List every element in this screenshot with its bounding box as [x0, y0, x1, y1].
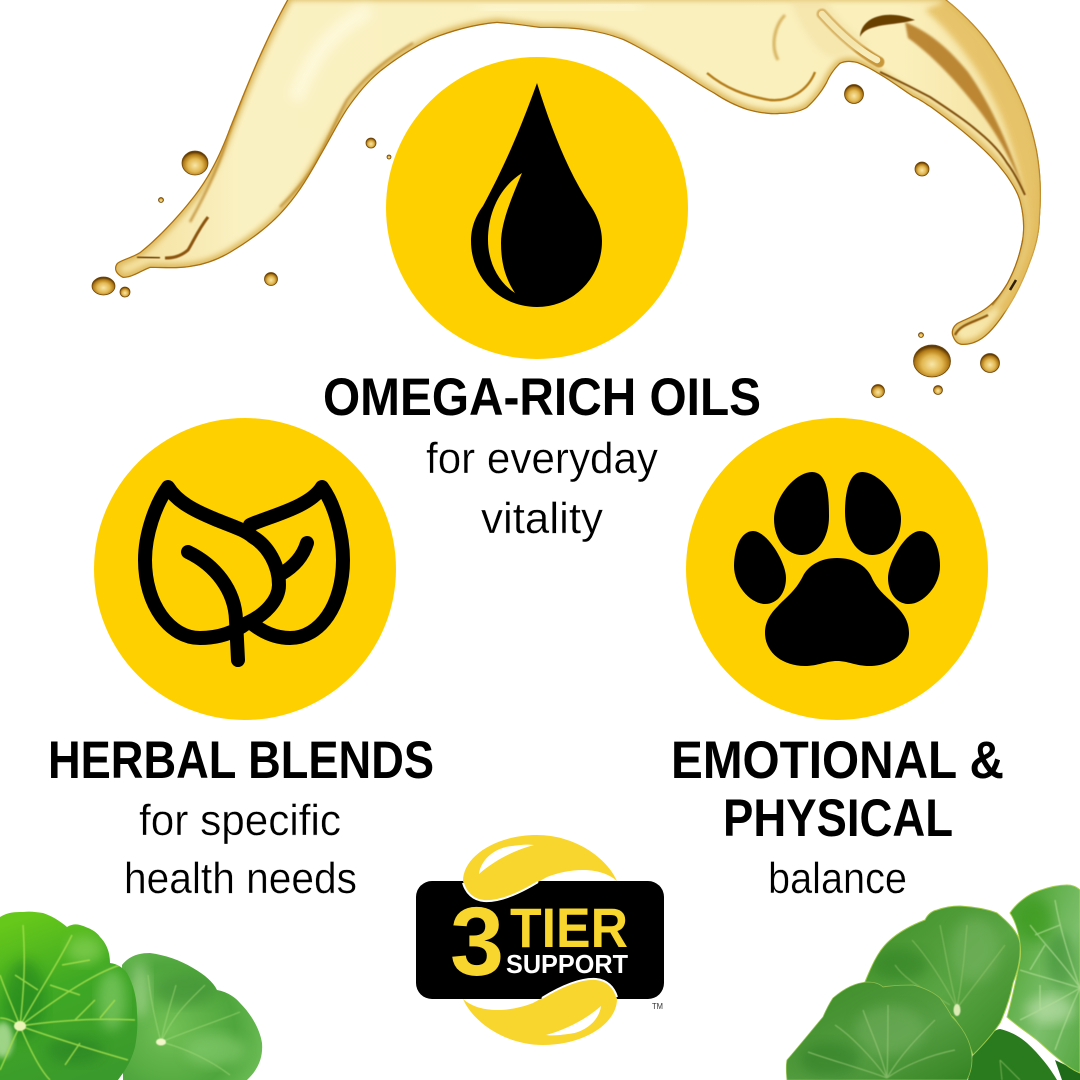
oil splash	[92, 0, 1041, 398]
amber streak: centre lower edge	[707, 72, 815, 100]
leaf: right	[1007, 885, 1080, 1073]
leaf: dark lower	[968, 1029, 1057, 1080]
text: for specific health needs: for specific	[139, 796, 341, 845]
heading: emotional and physical: EMOTIONAL &	[671, 731, 1004, 790]
panel: emotional and physical	[671, 418, 1004, 903]
yellow circle left	[94, 418, 396, 720]
panel: herbal blends	[48, 418, 434, 903]
leaves: bottom left	[0, 912, 262, 1080]
panel: omega-rich oils	[323, 57, 761, 543]
leaf: corner dark	[1055, 1060, 1080, 1080]
logo top swoosh	[463, 835, 617, 901]
logo word tier: TIER	[510, 896, 628, 959]
icon: leaves	[145, 487, 343, 660]
amber streak: upper right	[905, 22, 1025, 195]
dark inner line of right arm	[880, 72, 1025, 195]
leaves: bottom right	[786, 885, 1080, 1080]
icon: paw	[734, 472, 940, 666]
yellow circle top	[386, 57, 688, 359]
icon: oil drop	[471, 83, 602, 307]
heading: emotional and physical	[671, 731, 1004, 848]
oil inner shading	[115, 0, 1041, 345]
right arm golden band	[925, 0, 1041, 312]
logo: 3 tier support	[416, 835, 664, 1045]
amber streak: left arm	[190, 42, 265, 222]
yellow circle right	[686, 418, 988, 720]
text: for everyday vitality	[426, 434, 658, 543]
leaf: back	[122, 953, 262, 1080]
text: for everyday vitality: vitality	[481, 494, 603, 543]
text: balance: balance	[768, 854, 907, 903]
leaf: front left	[786, 982, 972, 1080]
logo bottom swoosh	[463, 979, 617, 1045]
logo word support: SUPPORT	[506, 949, 628, 979]
pale tube at junction	[822, 14, 879, 62]
trademark: TM	[652, 1002, 663, 1011]
leaf: back centre	[865, 906, 1020, 1055]
text: for specific health needs: health needs	[124, 854, 357, 903]
oil droplets	[92, 84, 1000, 398]
text: for specific health needs	[124, 796, 357, 903]
logo numeral: 3	[450, 887, 504, 996]
text: for everyday vitality: for everyday	[426, 434, 658, 483]
heading: herbal blends: HERBAL BLENDS	[48, 731, 434, 790]
leaf: front	[0, 912, 137, 1080]
heading: omega-rich oils: OMEGA-RICH OILS	[323, 368, 761, 427]
heading: emotional and physical: PHYSICAL	[723, 789, 953, 848]
logo black badge	[416, 881, 664, 999]
